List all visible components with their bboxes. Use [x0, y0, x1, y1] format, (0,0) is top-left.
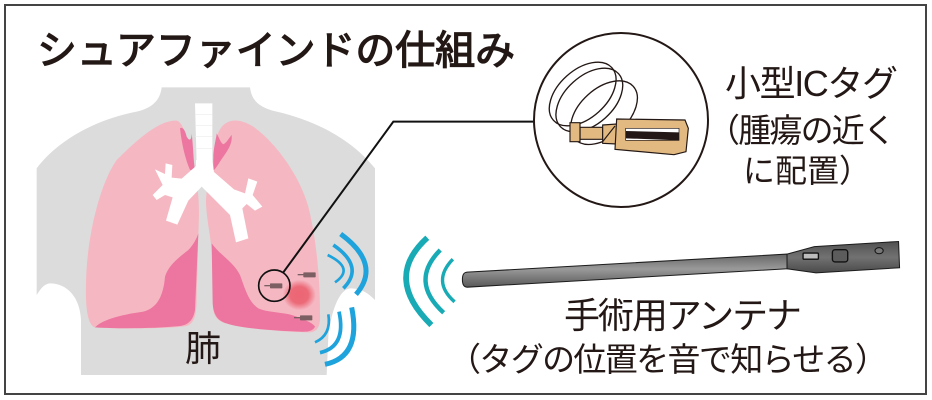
trachea	[195, 103, 212, 163]
signal waves: lower	[315, 307, 354, 364]
antenna waves	[406, 238, 455, 325]
antenna note: （タグの位置を音で知らせる）	[448, 341, 888, 378]
tag marker: circled	[264, 283, 282, 288]
antenna head	[787, 241, 900, 273]
zoomed tag circle	[534, 33, 708, 207]
magnifier circle	[259, 270, 290, 301]
tag capsule	[570, 119, 688, 155]
antenna label: 手術用アンテナ	[564, 295, 802, 336]
antenna buttons	[803, 248, 883, 262]
IC tag label: 小型ICタグ	[725, 63, 898, 104]
title: シュアファインドの仕組み	[37, 29, 515, 73]
trachea rings	[195, 114, 212, 148]
antenna shaft	[462, 254, 787, 287]
right upper vessel	[213, 133, 232, 171]
IC tag	[537, 50, 688, 157]
left upper vessel	[180, 128, 195, 170]
tag marker: upper	[298, 272, 316, 277]
IC tag note	[707, 112, 896, 189]
IC tag note: （腫瘍の近く	[707, 112, 896, 149]
signal waves: upper	[328, 234, 366, 294]
IC tag note: に配置）	[743, 153, 871, 189]
antenna	[406, 238, 900, 325]
leader line	[283, 122, 533, 272]
left lung	[86, 121, 199, 328]
right lung	[206, 121, 320, 332]
tag marker: lower	[294, 315, 312, 320]
left lower lobe	[95, 233, 198, 328]
coil	[537, 50, 649, 157]
body silhouette	[37, 87, 375, 375]
tumor	[283, 280, 316, 310]
tag slot	[626, 128, 679, 140]
lung illustration	[37, 87, 533, 375]
right lower lobe	[212, 243, 315, 332]
lung label: 肺	[185, 328, 221, 369]
bronchi	[153, 160, 262, 242]
